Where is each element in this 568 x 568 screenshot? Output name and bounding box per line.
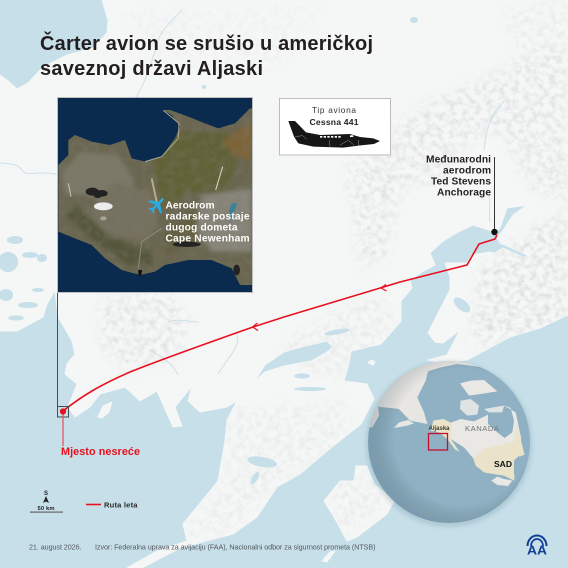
- label: Anchorage airport: Anchorage: [437, 188, 491, 198]
- panel: aircraft type: Tip aviona: [312, 105, 356, 115]
- north arrow and scale bar: S: [44, 491, 48, 497]
- locator rectangle: [428, 434, 448, 450]
- inset label: [166, 200, 250, 244]
- icon: blue airport plane: [145, 193, 169, 217]
- logo: Anadolu Agency: [527, 536, 548, 558]
- label: Anchorage airport: aerodrom: [443, 166, 491, 176]
- crash site marker: [58, 406, 68, 446]
- globe land: Asia: [370, 361, 480, 428]
- inset label: Cape Newenham: [166, 234, 250, 244]
- inset label: Aerodrom: [166, 200, 214, 212]
- title: Čarter avion se srušio u američkoj: [40, 31, 373, 55]
- footer: date: 21. august 2026.: [29, 542, 82, 552]
- inset label: dugog dometa: [166, 222, 238, 234]
- locator globe: [364, 351, 530, 523]
- label: Anchorage airport: [426, 154, 491, 198]
- panel: aircraft type: Cessna 441: [310, 117, 359, 127]
- lakes and rivers: [0, 10, 505, 486]
- legend: flight route: Ruta leta: [104, 500, 138, 510]
- label: Anchorage airport: Ted Stevens: [431, 176, 491, 188]
- flight route: [63, 235, 497, 411]
- inset label: radarske postaje: [166, 212, 250, 222]
- connector: inset to crash site: [56, 292, 58, 406]
- globe label: Canada: KANADA: [465, 424, 500, 433]
- north arrow and scale bar: [30, 491, 63, 513]
- icon: Cessna 441 silhouette: [288, 121, 380, 148]
- globe land: Canada: [449, 405, 521, 460]
- title: saveznoj državi Aljaski: [40, 58, 263, 80]
- globe shadow: [366, 361, 532, 527]
- panel: aircraft type: [280, 98, 390, 155]
- logo: Anadolu Agency: AA: [527, 542, 548, 558]
- arrow: route direction 1: [381, 284, 386, 291]
- title: [40, 31, 373, 80]
- label: Anchorage airport: Međunarodni: [426, 154, 491, 166]
- label: crash site: Mjesto nesreće: [61, 446, 140, 458]
- globe land: United States: [473, 424, 525, 481]
- north arrow and scale bar: 50 km: [38, 506, 54, 512]
- terrain: mountain relief texture: [102, 8, 568, 534]
- legend: flight route: [86, 500, 138, 510]
- globe label: Alaska: Aljaska: [428, 426, 450, 432]
- globe label: United States: SAD: [494, 459, 512, 469]
- footer: source: Izvor: Federalna uprava za avijaciju (FAA), Nacionalni odbor za sigurnost prometa (NTSB): [95, 542, 376, 552]
- arrow: route direction 2: [252, 323, 258, 330]
- panel: satellite inset of Cape Newenham: [55, 95, 255, 295]
- Anchorage airport marker: [491, 157, 498, 235]
- globe land: Alaska: [431, 419, 460, 452]
